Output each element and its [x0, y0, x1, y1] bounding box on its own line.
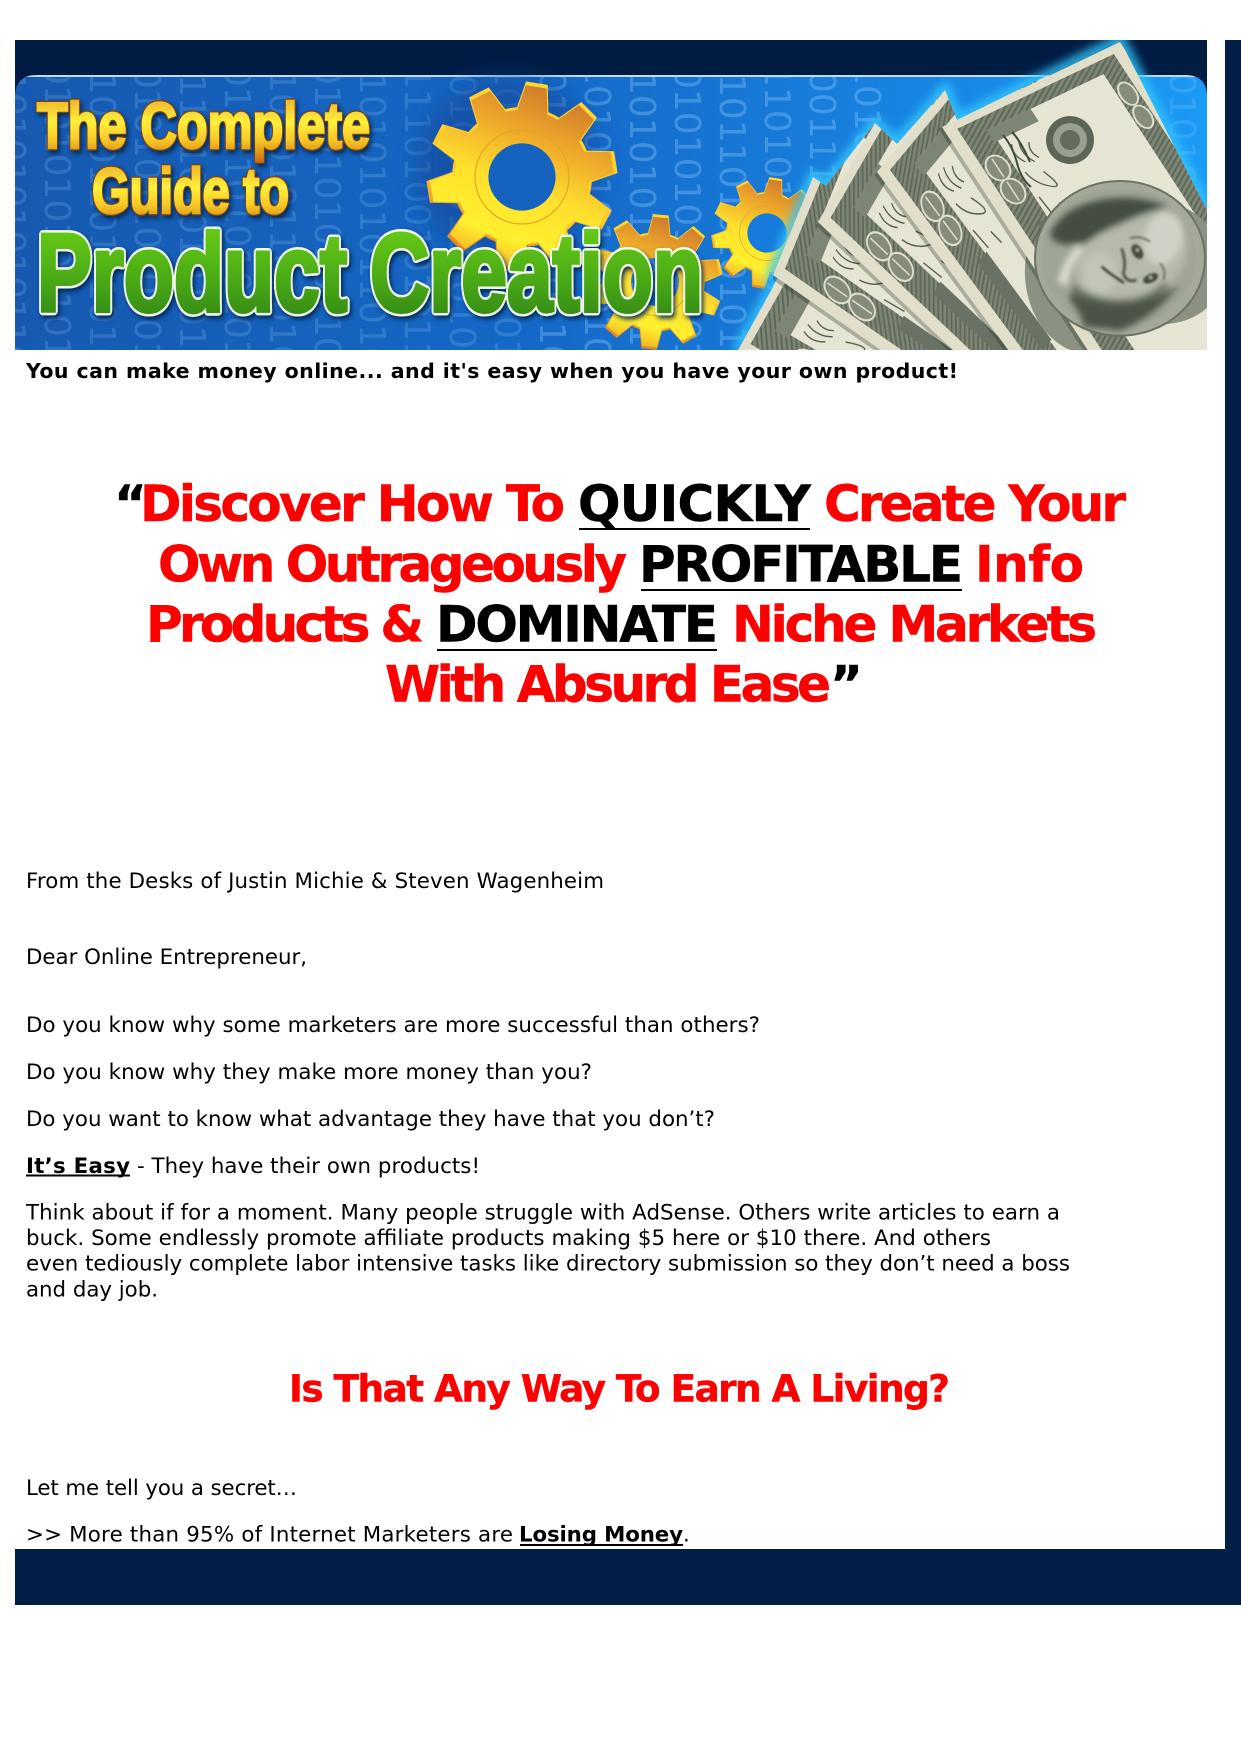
- bill 4: [773, 123, 953, 350]
- signature: [1003, 132, 1031, 187]
- answer line: - They have their own products!: [137, 1154, 480, 1179]
- paragraph: even tediously complete labor intensive tasks like directory submission so they don’t need a boss: [26, 1252, 1070, 1276]
- portrait: [1035, 181, 1205, 336]
- paragraph: Think about if for a moment. Many people struggle with AdSense. Others write articles to earn a: [25, 1200, 1060, 1226]
- headline line 4: With Absurd Ease: [385, 656, 831, 714]
- banner blue panel with binary digits: 01010101011010: [666, 66, 707, 387]
- banner blue panel with binary digits: 11101001010110: [396, 66, 437, 387]
- banner blue panel with binary digits: 01011010101010: [441, 74, 482, 395]
- headline line 1: “: [114, 475, 147, 533]
- banner title: The Complete: The Complete: [37, 89, 370, 162]
- salutation: Dear Online Entrepreneur,: [26, 945, 307, 970]
- banner title: The Complete: The Complete: [37, 89, 370, 162]
- banner blue panel with binary digits: 10101101010101: [81, 72, 122, 393]
- bill 3: [816, 90, 1008, 350]
- icon: small right gear: [711, 177, 806, 289]
- paragraph: [25, 1200, 1070, 1302]
- headline line 1: Discover How To: [140, 475, 565, 533]
- banner title: Guide to: [91, 164, 294, 222]
- question 2: Do you know why they make more money than you?: [26, 1060, 592, 1085]
- question 3: Do you want to know what advantage they have that you don’t?: [26, 1107, 715, 1132]
- headline line 4: ”: [830, 656, 863, 714]
- banner title: Guide to: Guide to: [92, 155, 289, 227]
- statistic line: Losing Money: [519, 1522, 683, 1548]
- banner blue panel with binary digits: 10110101010101: [711, 74, 752, 395]
- banner blue panel with binary digits: 10101011010110: [621, 72, 662, 393]
- headline line 1: Create Your: [824, 475, 1126, 533]
- banner blue panel with binary digits: [15, 75, 1207, 350]
- money glow: [737, 40, 1210, 352]
- question 1: Do you know why some marketers are more successful than others?: [26, 1013, 760, 1038]
- statistic line: .: [683, 1522, 690, 1548]
- paragraph: and day job.: [26, 1278, 158, 1302]
- headline line 1: QUICKLY: [578, 475, 812, 533]
- subheading: Is That Any Way To Earn A Living?: [289, 1366, 950, 1410]
- banner title: Product Creation: Product Creation: [37, 212, 703, 335]
- banner blue panel with binary digits: 01010101011010: [36, 62, 77, 383]
- banner title: Product Creation: Product Creation: [37, 212, 703, 335]
- headline line 1: [114, 475, 1126, 533]
- headline line 3: [146, 596, 1097, 654]
- large gear hole: [488, 144, 556, 210]
- right navy border stripe: [1225, 40, 1241, 1550]
- banner blue panel with binary digits: 01101010101101: [306, 62, 347, 383]
- bottom navy band: [15, 1549, 1241, 1605]
- headline line 2: Info: [975, 536, 1084, 594]
- paragraph: buck. Some endlessly promote affiliate products making $5 here or $10 there. And others: [26, 1226, 991, 1251]
- banner blue panel with binary digits: 00111010101010: [801, 70, 842, 391]
- banner blue panel with binary digits: 10101011010101: [261, 70, 302, 391]
- headline line 3: Products &: [146, 596, 424, 654]
- icon: large gear: [422, 77, 622, 277]
- banner blue panel with binary digits: 01010110101101: [531, 70, 572, 391]
- headline line 2: [158, 536, 1084, 594]
- answer line: It’s Easy: [26, 1154, 130, 1179]
- tagline: You can make money online... and it's easy when you have your own product!: [25, 359, 958, 383]
- small gear hole: [764, 213, 786, 253]
- headline line 3: Niche Markets: [732, 596, 1097, 654]
- banner blue panel with binary digits: 10101101010101: [576, 62, 617, 383]
- headline line 2: Own Outrageously: [158, 536, 627, 594]
- headline line 2: PROFITABLE: [639, 536, 963, 594]
- statistic line: >> More than 95% of Internet Marketers are: [26, 1522, 513, 1548]
- banner blue panel with binary digits: 01010101010101: [1161, 72, 1202, 393]
- banner navy background: [15, 40, 1207, 96]
- money fan: [738, 42, 1207, 350]
- banner: [15, 40, 1207, 350]
- front bill: [938, 42, 1207, 350]
- sender line: From the Desks of Justin Michie & Steven Wagenheim: [26, 869, 604, 894]
- headline: [114, 475, 1126, 714]
- banner blue panel with binary digits: 11010101101010: [756, 64, 797, 385]
- banner title: Product Creation: [38, 226, 708, 324]
- bill 2: [874, 76, 1088, 350]
- banner blue panel with binary digits: 10101001010101: [846, 62, 887, 383]
- icon: lower gear: [599, 214, 722, 350]
- banner blue panel with binary digits: 01011010101010: [216, 64, 257, 385]
- seal: [1046, 116, 1094, 164]
- headline line 3: DOMINATE: [436, 596, 718, 654]
- large gear shadow: [416, 76, 600, 260]
- banner blue panel with binary digits: 10101010110101: [351, 72, 392, 393]
- banner blue panel with binary digits: 10100101101010: [486, 64, 527, 385]
- bill 5: [738, 278, 881, 350]
- banner blue panel with binary digits: 11010101010110: [171, 74, 212, 395]
- secret line: Let me tell you a secret…: [26, 1476, 297, 1501]
- banner blue panel with binary digits: 01010110101010: [126, 66, 167, 387]
- banner title: Guide to: Guide to: [92, 155, 289, 227]
